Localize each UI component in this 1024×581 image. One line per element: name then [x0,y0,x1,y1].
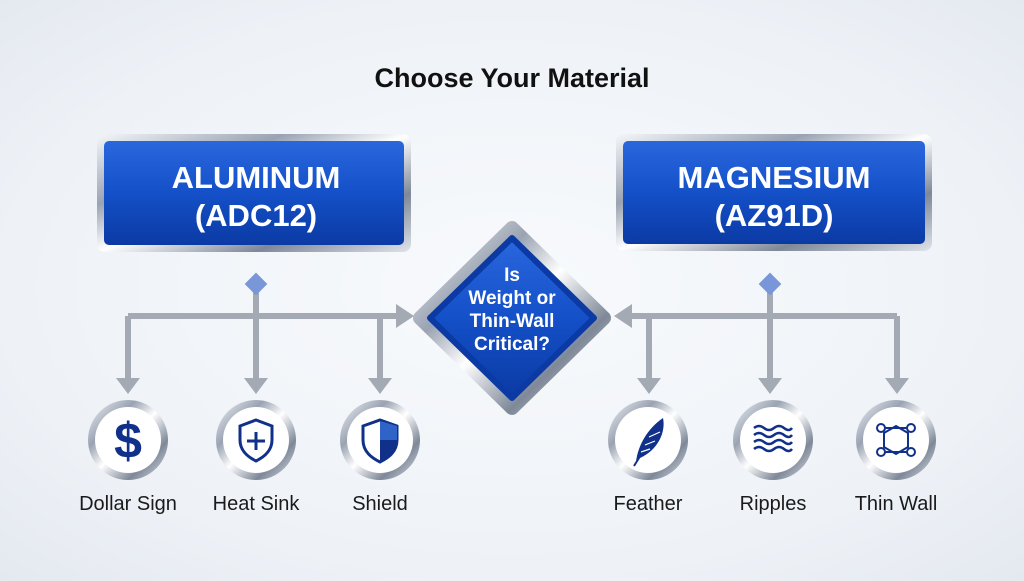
icon: shield [340,400,420,480]
icon: dollar [88,400,168,480]
box: magnesium: MAGNESIUM [678,160,870,195]
decision diamond: Weight or [468,288,556,309]
box: magnesium [616,134,932,251]
box: aluminum: (ADC12) [195,198,317,233]
labels: Dollar Sign [79,493,177,515]
labels: Ripples [740,493,806,515]
connectors: right [614,273,909,394]
icon: thin wall [856,400,936,480]
box: magnesium: (AZ91D) [715,198,833,233]
icon: ripples [733,400,813,480]
title: Choose Your Material [374,63,650,93]
labels: Heat Sink [213,493,300,515]
labels [79,493,937,515]
labels: Shield [352,493,408,515]
labels: Thin Wall [855,493,937,515]
decision diamond: Is [504,265,520,286]
labels: Feather [614,493,683,515]
icon: heat sink shield plus [216,400,296,480]
decision diamond: Critical? [474,334,550,355]
icon: dollar: $ [114,413,142,469]
box: aluminum [97,134,411,252]
decision diamond [420,228,604,408]
box: aluminum: ALUMINUM [172,160,340,195]
icon: feather [608,400,688,480]
connectors: left [116,273,414,394]
decision diamond: Thin-Wall [470,311,554,332]
